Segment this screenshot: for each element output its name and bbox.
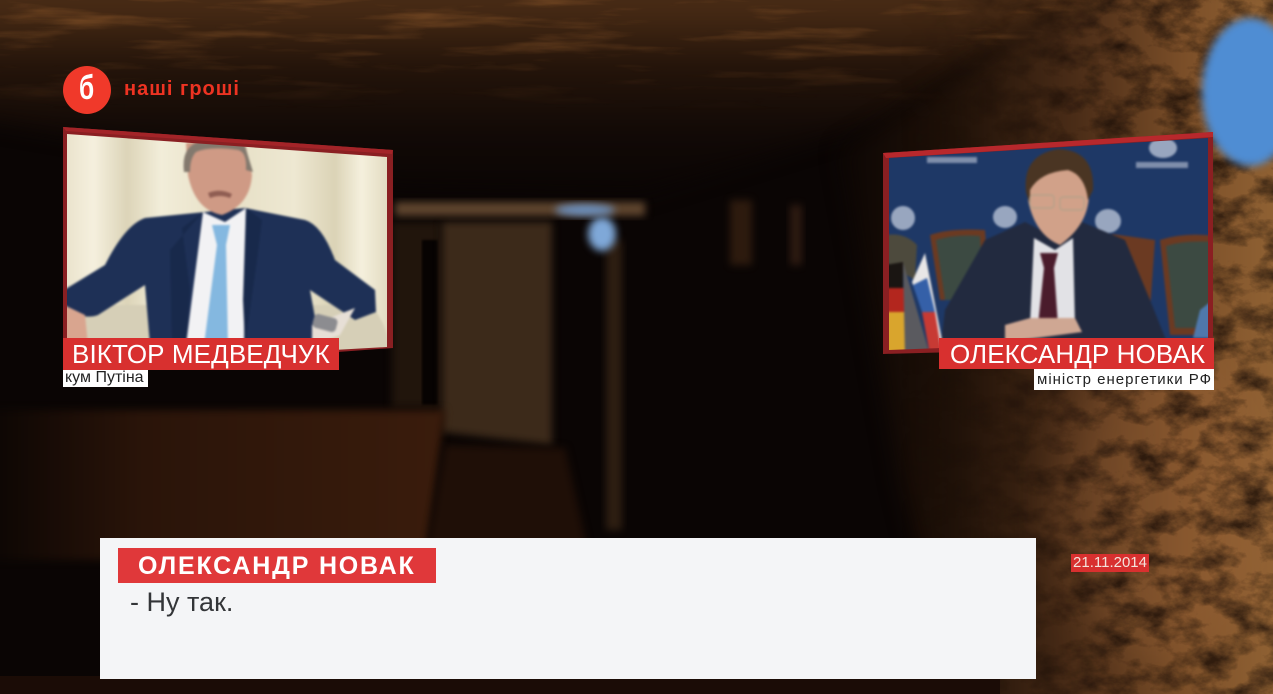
name label: Novak: ОЛЕКСАНДР НОВАК — [950, 339, 1205, 369]
quote text: - Ну так. — [130, 587, 233, 617]
right rusty wall — [840, 0, 1273, 694]
name label: Medvedchuk: ВІКТОР МЕДВЕДЧУК — [72, 339, 330, 369]
floor — [0, 410, 1000, 694]
logo: round red badge — [63, 66, 111, 114]
emblems — [891, 206, 915, 230]
hands — [1005, 318, 1082, 342]
logo: round red badge: б — [79, 69, 95, 107]
left portrait photo — [63, 127, 393, 352]
speaker name — [118, 548, 436, 583]
tie — [204, 225, 230, 345]
far corridor with light — [392, 202, 645, 530]
role label: Medvedchuk: кум Путіна — [65, 369, 144, 386]
date stamp: 21.11.2014 — [1073, 554, 1147, 571]
shirt — [186, 208, 246, 345]
tie — [1038, 253, 1058, 332]
dark central column — [730, 200, 802, 265]
head — [1028, 158, 1089, 245]
frame — [883, 132, 1213, 354]
chairs — [930, 230, 990, 300]
jacket — [64, 208, 376, 345]
ceiling — [0, 0, 1094, 131]
lapel — [243, 208, 262, 345]
jacket — [941, 222, 1168, 345]
frame — [63, 127, 393, 372]
cuffs and hands — [67, 304, 88, 338]
logo text: наші гроші — [124, 78, 240, 100]
right portrait photo — [880, 130, 1215, 355]
sofa — [84, 305, 387, 350]
flags — [889, 261, 904, 290]
shirt — [1030, 238, 1075, 325]
speaker name: ОЛЕКСАНДР НОВАК — [138, 552, 416, 580]
role label: Novak: міністр енергетики РФ — [1037, 371, 1212, 388]
transcript panel — [100, 538, 1036, 679]
head — [186, 140, 252, 215]
